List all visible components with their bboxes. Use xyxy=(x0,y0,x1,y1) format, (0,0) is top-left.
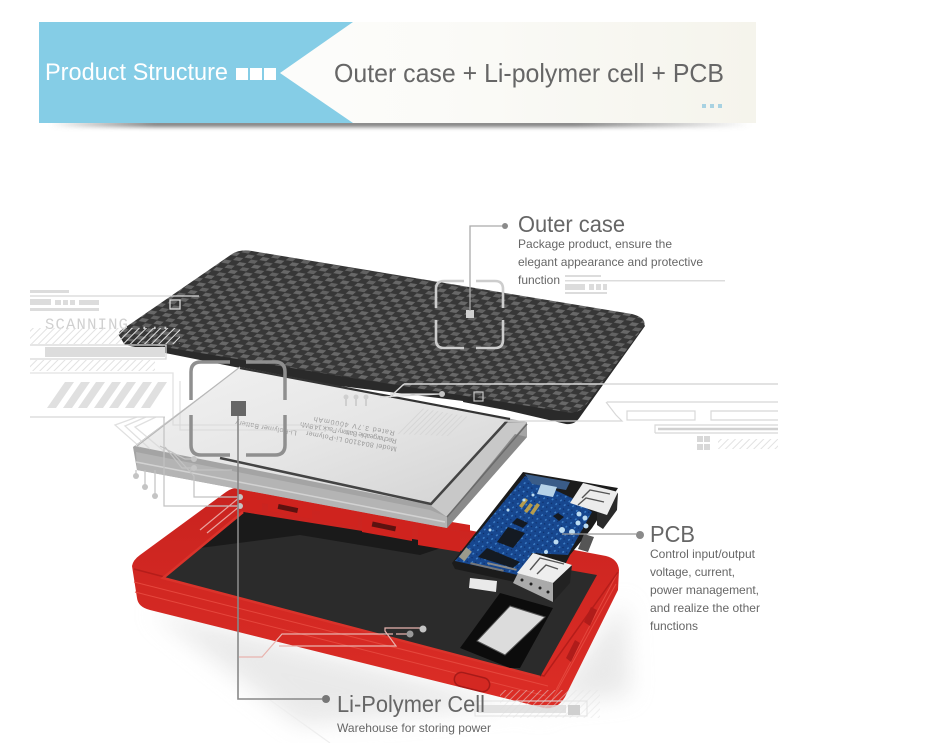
battery printed text: Rechargeable Battery Pack 14.8Wh xyxy=(300,420,397,444)
shadow under red case xyxy=(150,600,630,725)
description: functions xyxy=(650,619,698,633)
micro port xyxy=(578,534,594,552)
battery printed text: Model 8043100 Li-Polymer xyxy=(305,429,397,452)
target bracket xyxy=(191,362,285,455)
case rim shading xyxy=(134,569,618,676)
tabs behind battery xyxy=(240,487,470,552)
scanning label: SCANNING ... xyxy=(45,316,170,334)
description: voltage, current, xyxy=(650,565,735,579)
circuit lines overlay xyxy=(136,367,778,743)
red bottom case xyxy=(132,487,619,708)
inner wall xyxy=(163,512,540,677)
carbon surface xyxy=(119,250,644,412)
diagonal stripes xyxy=(47,382,167,408)
banner background xyxy=(39,22,756,123)
hud square xyxy=(568,705,580,715)
callout: PCB xyxy=(562,521,760,633)
battery edge below case xyxy=(340,387,463,402)
battery printed text: Li-Polymer Battery xyxy=(235,418,297,436)
description: Control input/output xyxy=(650,547,756,561)
blue arrow panel xyxy=(39,22,353,123)
target bracket outer case xyxy=(436,281,503,348)
description: elegant appearance and protective xyxy=(518,255,703,269)
description: and realize the other xyxy=(650,601,760,615)
side ports xyxy=(566,607,597,662)
small components xyxy=(459,547,517,572)
top hatch on battery xyxy=(395,408,470,436)
hud hatch right xyxy=(718,439,778,449)
description xyxy=(518,237,703,287)
right tray slope xyxy=(430,422,527,517)
hatch overlay xyxy=(500,690,600,718)
tab slots xyxy=(278,504,396,531)
power button xyxy=(453,671,491,693)
black floor xyxy=(163,512,597,677)
base board xyxy=(452,472,618,590)
target square xyxy=(466,310,474,318)
shadow of battery on floor xyxy=(200,512,450,555)
white label xyxy=(537,484,557,497)
hud lines xyxy=(565,275,725,294)
leader line xyxy=(470,226,502,311)
blue board xyxy=(455,476,592,575)
description: Package product, ensure the xyxy=(518,237,672,251)
red case side ridges xyxy=(134,574,617,700)
black outer case xyxy=(118,250,645,424)
window xyxy=(477,606,545,655)
top left connector strip xyxy=(525,474,570,490)
USB port upper xyxy=(570,483,618,529)
three dots xyxy=(702,104,722,108)
dark case side xyxy=(118,320,645,424)
white connector xyxy=(469,578,497,592)
chips xyxy=(478,513,564,568)
three squares xyxy=(236,68,276,80)
heading: Li-Polymer Cell xyxy=(337,691,485,717)
PCB xyxy=(452,472,618,602)
circuit nodes xyxy=(133,391,445,638)
heading: Outer case xyxy=(518,211,625,237)
solder pads xyxy=(488,494,588,554)
hud overlay xyxy=(475,701,587,716)
description: Warehouse for storing power xyxy=(337,721,491,735)
description xyxy=(650,547,760,633)
banner shadow xyxy=(50,121,750,127)
red case overlay line xyxy=(239,628,423,657)
description: power management, xyxy=(650,583,759,597)
description: function xyxy=(518,273,560,287)
banner xyxy=(39,22,756,127)
target square xyxy=(231,401,246,416)
banner subtitle: Outer case + Li-polymer cell + PCB xyxy=(334,58,724,88)
callout: Li-Polymer Cell xyxy=(191,362,600,735)
window recess xyxy=(460,593,553,668)
hud squares right xyxy=(697,436,710,450)
USB port lower xyxy=(513,553,572,602)
tray silhouette xyxy=(133,367,527,528)
hud bar xyxy=(478,705,566,713)
leader line xyxy=(562,533,636,535)
tray front light band xyxy=(136,452,447,528)
callout: Outer case xyxy=(436,211,725,348)
red case outer body xyxy=(132,488,619,708)
battery printed text xyxy=(235,415,397,452)
status bars xyxy=(30,290,165,357)
small battery pips xyxy=(344,394,368,406)
battery printed text: Rated 3.7V 4000mAh xyxy=(313,415,395,436)
battery xyxy=(133,367,527,528)
leader line xyxy=(238,416,322,699)
hud graphics left xyxy=(30,290,342,452)
cell surface xyxy=(135,367,507,505)
yellow pads xyxy=(519,498,540,515)
heading: PCB xyxy=(650,521,695,547)
banner heading: Product Structure xyxy=(45,59,228,86)
